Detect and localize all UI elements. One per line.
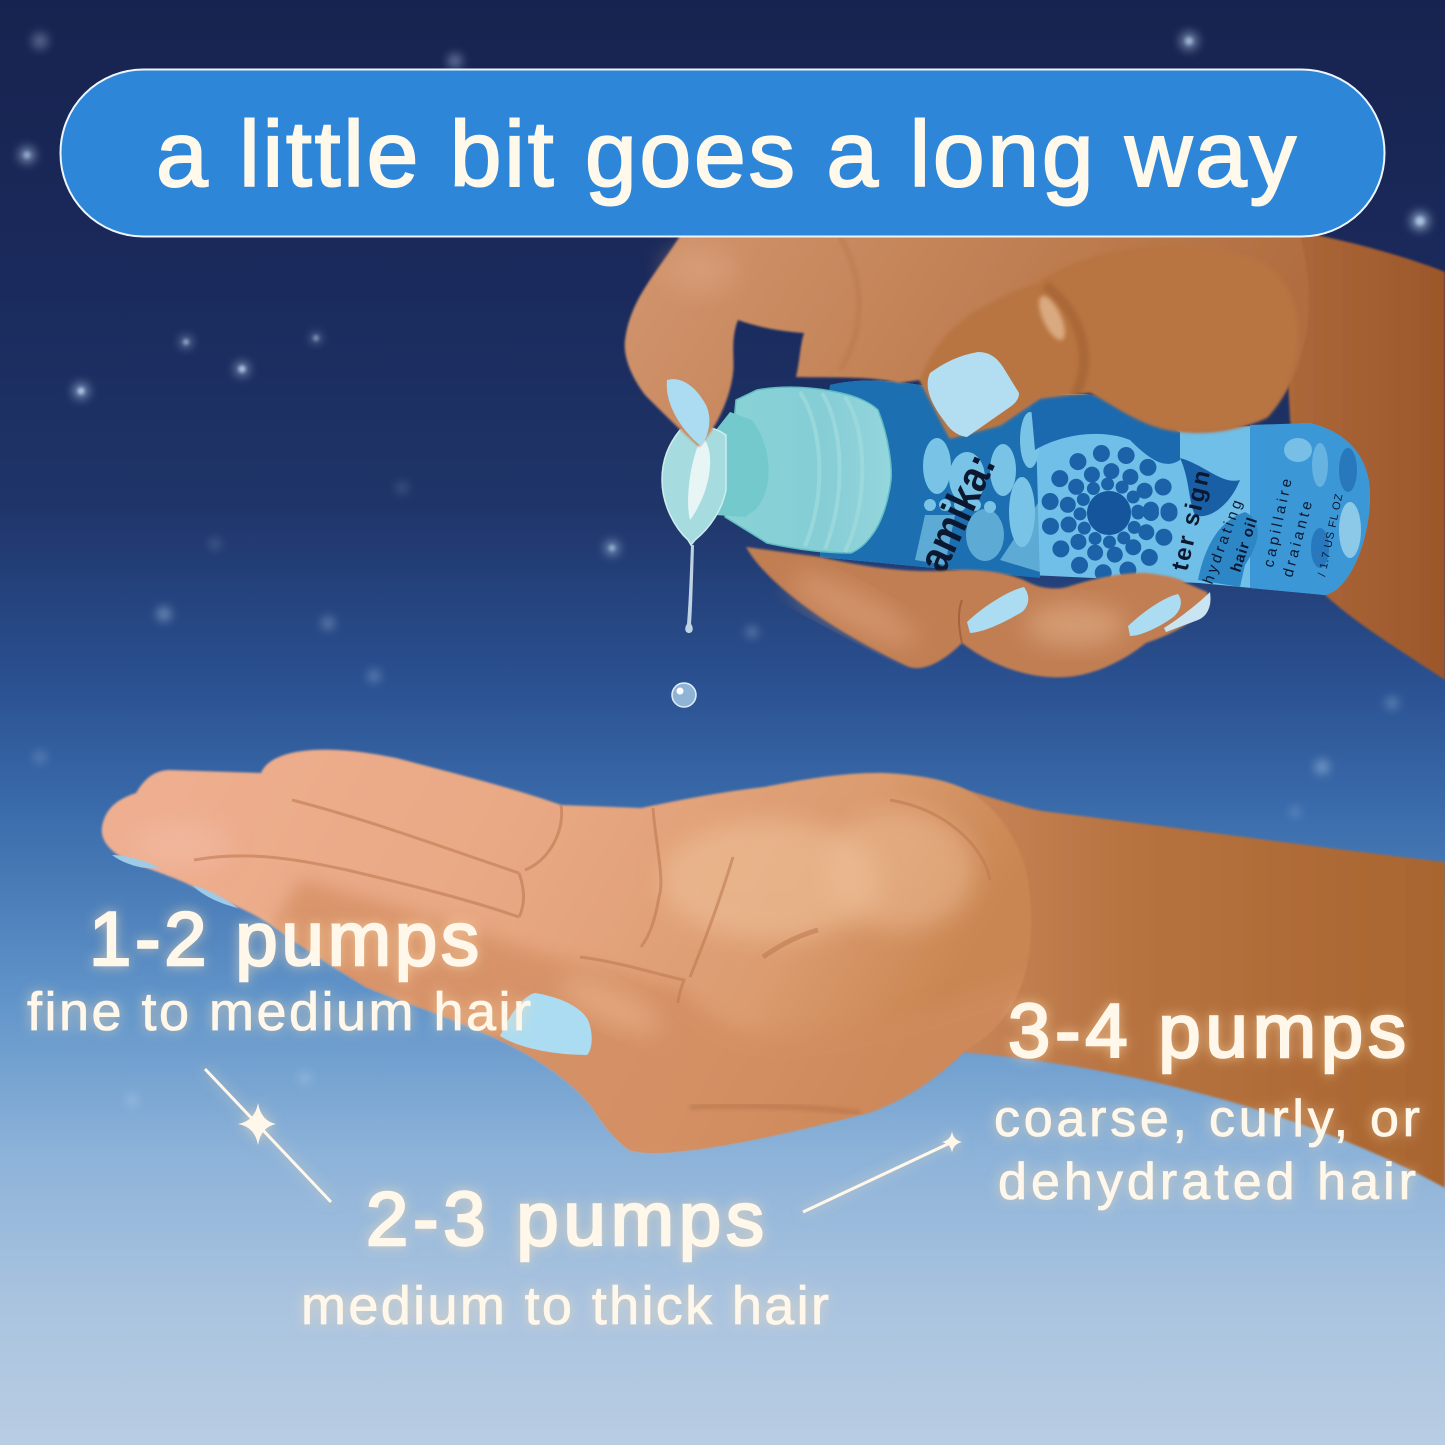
thumb (920, 245, 1299, 438)
fingertip nails (112, 855, 160, 868)
bottle (662, 380, 1370, 595)
lower forearm (950, 785, 1445, 1188)
callout: 1-2 pumps (27, 897, 531, 1042)
finger highlights (785, 561, 925, 659)
lower finger nails (967, 587, 1028, 633)
spout (708, 412, 769, 517)
oil stream (685, 545, 694, 633)
nozzle tip (662, 426, 726, 545)
text: fine to medium hair: fine to medium hair (27, 982, 531, 1042)
bottle: / 1.7 US FL OZ (1316, 493, 1345, 578)
title text: a little bit goes a long way (156, 102, 1296, 206)
flower graphic (1049, 453, 1169, 573)
palm centre glow (660, 820, 880, 940)
knuckle highlight (665, 248, 735, 292)
upper forearm behind bottle (1280, 228, 1445, 680)
bottle: ter sign (1167, 468, 1216, 573)
lower hand (102, 750, 1040, 1170)
bottle: hydrating (1200, 498, 1246, 586)
knuckle fold (840, 236, 859, 370)
arrow: shooting star right (803, 1131, 962, 1212)
callout: 2-3 pumps (301, 1177, 829, 1336)
bottle label text: amika: (909, 446, 1005, 579)
palm shading group clipped to hand (130, 810, 1040, 1170)
thumb crease (1045, 285, 1084, 395)
dark swoosh shapes (1180, 458, 1240, 516)
thumb mound glow (825, 810, 975, 930)
callout: 2-3 pumps: 2-3 pumps (366, 1177, 764, 1262)
fingertip glow (141, 826, 220, 880)
cap ridges (800, 392, 862, 552)
bottle: capillaire (1260, 477, 1296, 569)
upper hand: fingers under bottle (746, 547, 1209, 677)
cap (725, 387, 891, 553)
text: medium to thick hair: medium to thick hair (301, 1276, 829, 1336)
oil droplet (672, 683, 696, 707)
dark shoulder with pattern band (820, 380, 1040, 578)
upper hand: index finger and knuckles (625, 236, 1309, 447)
lower thumb fold shadow (690, 1106, 860, 1113)
text: coarse, curly, or: coarse, curly, or (994, 1090, 1420, 1148)
callout: 3-4 pumps (994, 989, 1420, 1211)
palm creases (194, 800, 990, 1003)
text: dehydrated hair: dehydrated hair (998, 1153, 1416, 1211)
thumb nail (928, 352, 1019, 437)
dark petals above flower (1030, 395, 1180, 464)
thumb and lower palm shading (260, 880, 1040, 1170)
thumb highlight (1034, 292, 1070, 344)
bottle body (820, 380, 1370, 595)
arrow: shooting star left (205, 1069, 331, 1202)
bottle: hair oil (1228, 516, 1261, 574)
title pill (60, 70, 1384, 236)
dark rear end of bottle (1250, 423, 1370, 595)
thumb highlight (564, 976, 658, 1036)
lower thumb nail (500, 993, 592, 1055)
pattern shapes around logo (915, 412, 1040, 572)
rear pattern shapes (1284, 438, 1312, 462)
index finger nail (667, 379, 709, 446)
bottle: draiante (1279, 499, 1316, 579)
stars (19, 32, 1429, 1106)
callout: 3-4 pumps: 3-4 pumps (1008, 989, 1406, 1074)
nozzle highlight (688, 436, 710, 520)
callout: 1-2 pumps: 1-2 pumps (89, 897, 479, 982)
